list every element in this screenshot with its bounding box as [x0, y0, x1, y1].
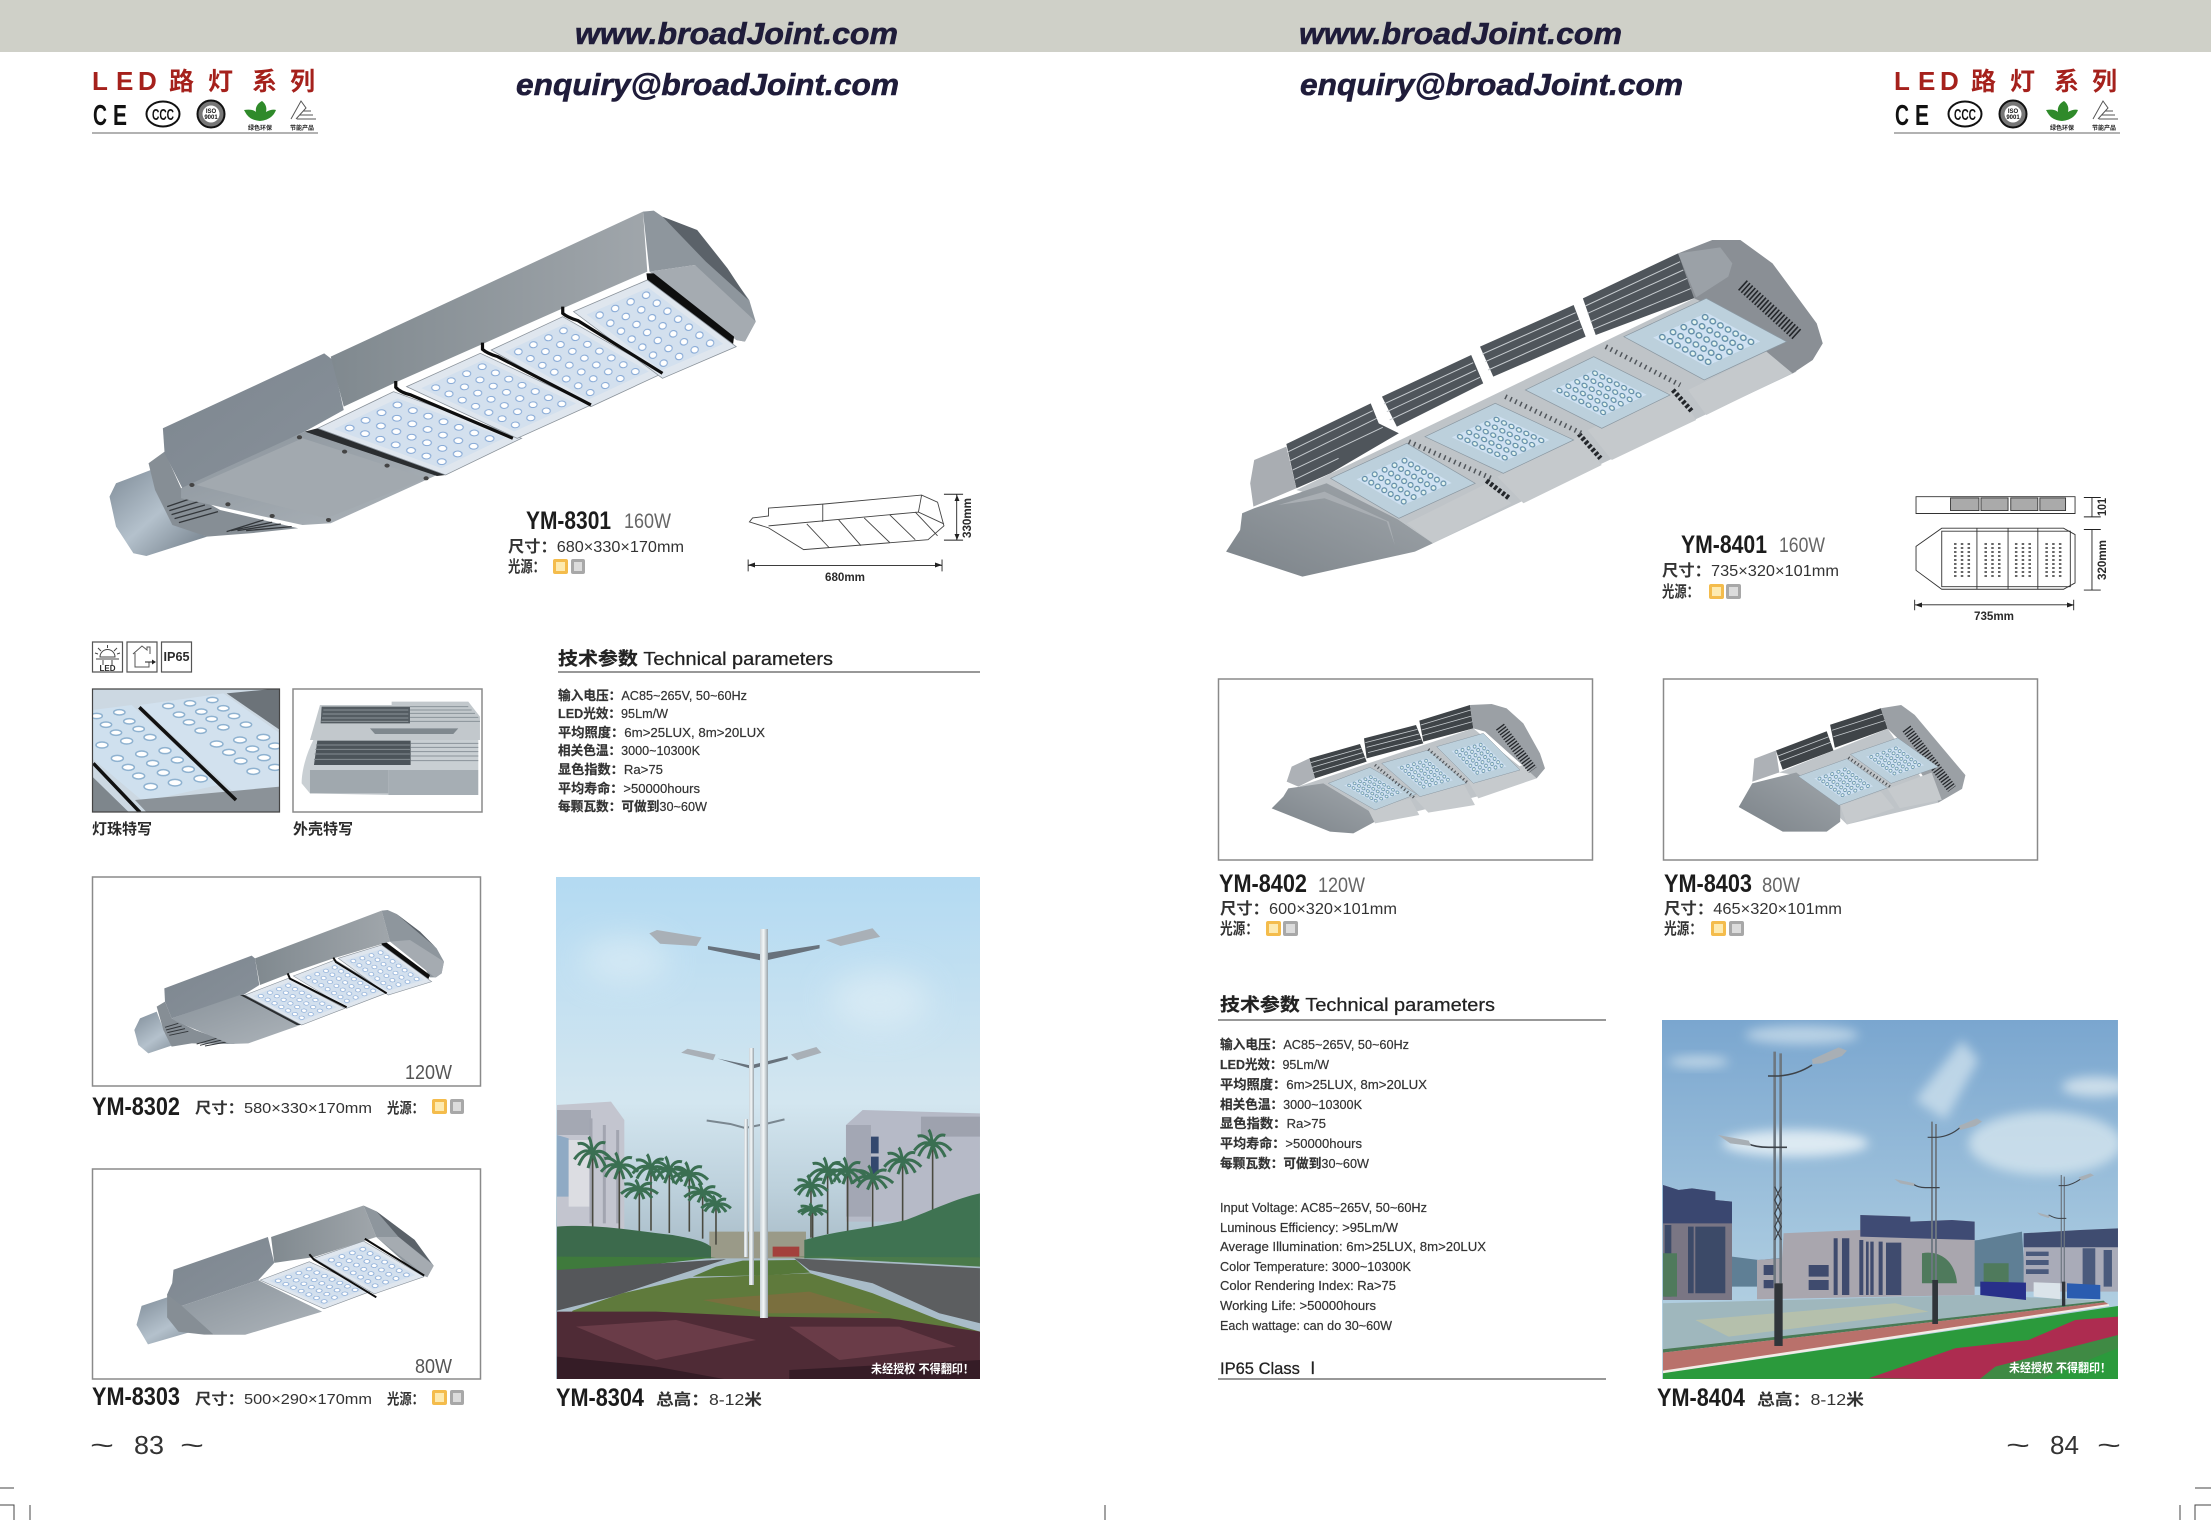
header band [0, 0, 2211, 52]
right technical parameters: 平均寿命：>50000hours [1220, 1136, 1362, 1151]
right technical parameters: 显色指数：Ra>75 [1220, 1116, 1326, 1131]
left technical parameters: 相关色温：3000~10300K [558, 743, 700, 758]
page number 83 [90, 1430, 204, 1460]
left series title and certification logos: L [92, 66, 108, 96]
right technical parameters: 每颗瓦数：可做到30~60W [1220, 1156, 1370, 1171]
photo: YM-8404 street lights: 未经授权 不得翻印！ [2009, 1360, 2111, 1375]
page number 84: 84 [2050, 1430, 2079, 1460]
left series title and certification logos: 9001 [204, 115, 218, 121]
dimension drawing: YM-8301 [748, 494, 974, 584]
right series title and certification logos: 列 [2092, 68, 2117, 96]
dimension drawing: YM-8401: 101 [2095, 498, 2109, 516]
panel: YM-8302 lamp box: 120W [405, 1062, 452, 1084]
right technical parameters: Working Life: >50000hours [1220, 1298, 1377, 1313]
right technical parameters [1218, 994, 1606, 1379]
right series title and certification logos: 灯 [2010, 68, 2035, 96]
left series title and certification logos: 路 [169, 68, 194, 96]
dimension drawing: YM-8301: 680mm [825, 570, 865, 584]
close-up photo: housing [293, 689, 482, 812]
right technical parameters: LED光效：95Lm/W [1220, 1057, 1330, 1072]
left series title and certification logos [92, 66, 318, 133]
YM-8303 label [92, 1383, 464, 1411]
YM-8401 label: YM-8401 [1681, 531, 1767, 559]
right technical parameters: Input Voltage: AC85~265V, 50~60Hz [1220, 1200, 1427, 1215]
YM-8404 label [1657, 1384, 1864, 1412]
feature icons: LED, house, IP65: LED [100, 664, 116, 673]
YM-8403 label [1664, 870, 1842, 938]
right series title and certification logos: C [1895, 100, 1909, 132]
page number 84: ~ [2006, 1430, 2030, 1460]
right technical parameters: 技术参数 Technical parameters [1220, 994, 1495, 1015]
YM-8301 label: 160W [624, 510, 671, 533]
right series title and certification logos: ISO [2008, 109, 2018, 115]
right series title and certification logos: 9001 [2006, 115, 2020, 121]
page number 83: 83 [134, 1430, 164, 1460]
YM-8403 label: 尺寸：465×320×101mm [1664, 899, 1842, 918]
left series title and certification logos: E [113, 100, 127, 132]
left series title and certification logos: CCC [152, 107, 174, 124]
YM-8301 label: YM-8301 [526, 507, 611, 535]
left technical parameters: 平均寿命：>50000hours [558, 781, 700, 796]
YM-8304 label: 总高： 8-12米 [656, 1390, 762, 1409]
left email: enquiry@broadJoint.com [516, 67, 899, 102]
YM-8401 label: 尺寸：735×320×101mm [1662, 561, 1839, 580]
photo: YM-8304 street lights: 未经授权 不得翻印！ [871, 1361, 974, 1376]
close-up photo: LED beads [91, 688, 281, 812]
left technical parameters: 平均照度：6m>25LUX, 8m>20LUX [558, 725, 765, 740]
page number 84 [2006, 1430, 2121, 1460]
YM-8302 label: 尺寸： 580×330×170mm [195, 1100, 372, 1117]
right technical parameters: 相关色温：3000~10300K [1220, 1097, 1362, 1112]
YM-8404 label: YM-8404 [1657, 1384, 1745, 1412]
right series title and certification logos [1894, 66, 2120, 133]
dimension drawing: YM-8301: 330mm [960, 498, 974, 538]
lamp photo: YM-8301 [110, 211, 756, 556]
YM-8402 label [1219, 870, 1397, 938]
page number 84: ~ [2097, 1430, 2121, 1460]
right technical parameters: Luminous Efficiency: >95Lm/W [1220, 1220, 1399, 1235]
right technical parameters: 平均照度：6m>25LUX, 8m>20LUX [1220, 1077, 1427, 1092]
left series title and certification logos: D [138, 66, 157, 96]
YM-8301 label [508, 507, 684, 576]
right series title and certification logos: E [1918, 66, 1935, 96]
left series title and certification logos: 系 [252, 68, 277, 96]
YM-8304 label: YM-8304 [556, 1384, 644, 1412]
dimension drawing: YM-8401 [1915, 497, 2109, 623]
right series title and certification logos: 路 [1971, 68, 1996, 96]
left technical parameters [558, 648, 980, 814]
right series title and certification logos: 节能产品 [2092, 124, 2116, 132]
YM-8402 label: YM-8402 [1219, 870, 1307, 898]
panel: YM-8302 lamp box [92, 877, 480, 1086]
left series title and certification logos: 灯 [208, 68, 233, 96]
right email: enquiry@broadJoint.com [1300, 67, 1683, 102]
right technical parameters: Each wattage: can do 30~60W [1220, 1318, 1393, 1333]
caption: LED beads: 灯珠特写 [92, 820, 152, 838]
YM-8402 label: 120W [1318, 874, 1365, 897]
right series title and certification logos: E [1915, 100, 1929, 132]
right series title and certification logos: D [1940, 66, 1959, 96]
left series title and certification logos: C [93, 100, 107, 132]
feature icons: LED, house, IP65: IP65 [164, 650, 190, 664]
left technical parameters: 输入电压：AC85~265V, 50~60Hz [558, 688, 747, 703]
feature icons: LED, house, IP65 [92, 642, 192, 673]
YM-8303 label: 光源： [387, 1391, 424, 1408]
page number 83: ~ [180, 1430, 204, 1460]
YM-8304 label [556, 1384, 762, 1412]
right series title and certification logos: 系 [2054, 68, 2079, 96]
right website url: www.broadJoint.com [1299, 16, 1622, 51]
YM-8302 label: 光源： [387, 1100, 424, 1117]
YM-8302 label: YM-8302 [92, 1093, 180, 1121]
YM-8402 label: 光源： [1220, 920, 1258, 938]
YM-8403 label: YM-8403 [1664, 870, 1752, 898]
left technical parameters: 每颗瓦数：可做到30~60W [558, 799, 708, 814]
lamp photo: YM-8401 [1226, 240, 1823, 577]
YM-8401 label: 160W [1779, 534, 1825, 557]
right technical parameters: 输入电压：AC85~265V, 50~60Hz [1220, 1037, 1409, 1052]
right technical parameters: Average Illumination: 6m>25LUX, 8m>20LUX [1220, 1239, 1486, 1254]
YM-8401 label [1662, 531, 1839, 601]
photo: YM-8304 street lights [556, 877, 980, 1380]
panel: YM-8402 lamp box [1218, 679, 1592, 860]
right technical parameters: IP65 Class Ⅰ [1220, 1359, 1321, 1378]
dimension drawing: YM-8401: 320mm [2095, 540, 2109, 580]
left series title and certification logos: 绿色环保 [248, 124, 272, 132]
YM-8402 label: 尺寸：600×320×101mm [1220, 899, 1397, 918]
YM-8401 label: 光源： [1662, 583, 1699, 601]
left series title and certification logos: 节能产品 [290, 124, 314, 132]
YM-8404 label: 总高： 8-12米 [1757, 1390, 1864, 1409]
YM-8302 label [92, 1093, 464, 1121]
YM-8303 label: YM-8303 [92, 1383, 180, 1411]
left technical parameters: 显色指数：Ra>75 [558, 762, 663, 777]
left series title and certification logos: 列 [290, 68, 315, 96]
YM-8301 label: 尺寸：680×330×170mm [508, 537, 684, 556]
right technical parameters: Color Temperature: 3000~10300K [1220, 1259, 1411, 1274]
left website url: www.broadJoint.com [575, 16, 898, 51]
right series title and certification logos: L [1894, 66, 1910, 96]
panel: YM-8303 lamp box [92, 1169, 480, 1379]
photo: YM-8404 street lights [1662, 1020, 2129, 1380]
page number 83: ~ [90, 1430, 114, 1460]
YM-8403 label: 光源： [1664, 920, 1702, 938]
right series title and certification logos: CCC [1954, 107, 1976, 124]
right technical parameters: Color Rendering Index: Ra>75 [1220, 1278, 1396, 1293]
left technical parameters: LED光效：95Lm/W [558, 706, 669, 721]
panel: YM-8303 lamp box: 80W [415, 1356, 452, 1378]
left technical parameters: 技术参数 Technical parameters [558, 648, 833, 669]
left series title and certification logos: E [116, 66, 133, 96]
panel: YM-8403 lamp box [1664, 679, 2038, 860]
right series title and certification logos: 绿色环保 [2050, 124, 2074, 132]
left series title and certification logos: ISO [206, 109, 216, 115]
caption: housing: 外壳特写 [293, 820, 353, 838]
YM-8403 label: 80W [1762, 874, 1800, 897]
YM-8303 label: 尺寸： 500×290×170mm [195, 1391, 372, 1408]
dimension drawing: YM-8401: 735mm [1974, 609, 2014, 623]
YM-8301 label: 光源： [508, 558, 545, 576]
